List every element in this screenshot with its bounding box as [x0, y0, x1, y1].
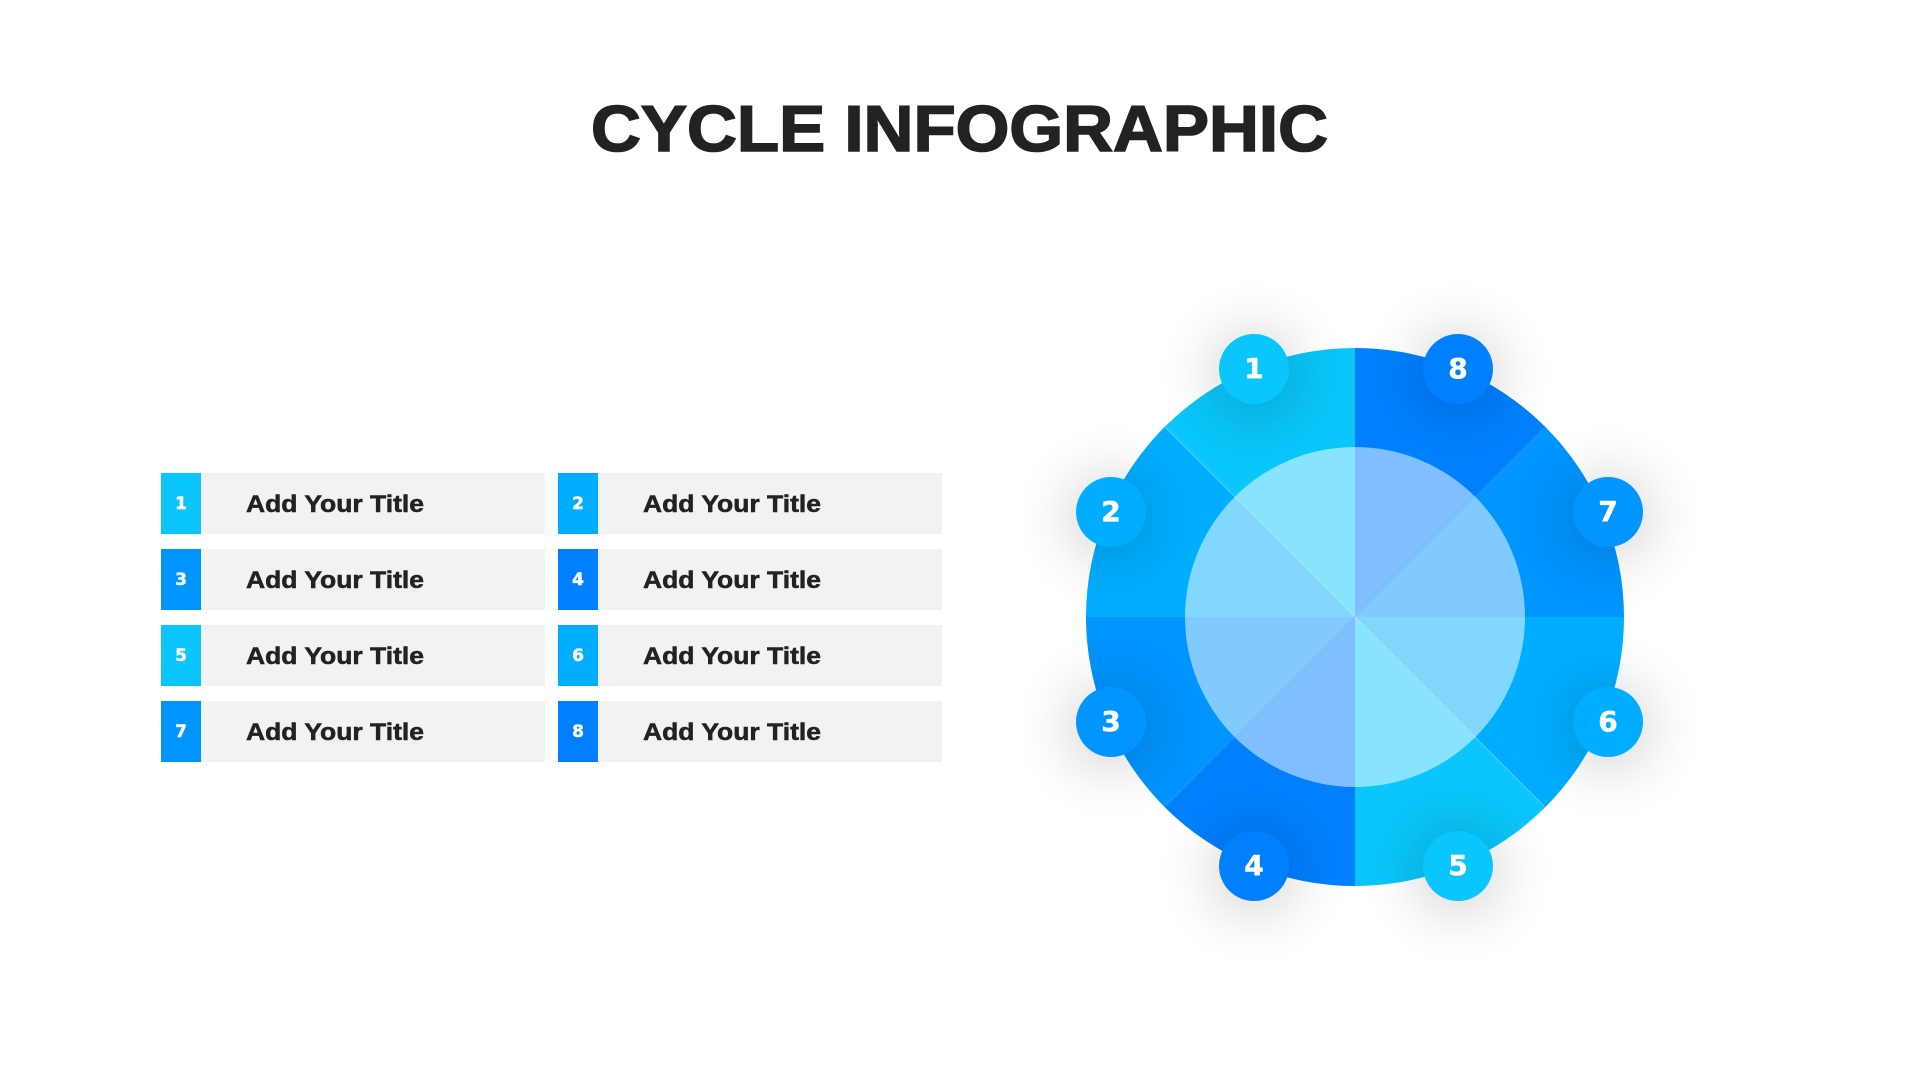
list row 6: 6 — [572, 646, 584, 666]
list row 1: 1 — [175, 494, 187, 514]
badge 8 — [1423, 334, 1493, 404]
list row 5: 5 — [175, 646, 187, 666]
list row 2: 2 — [572, 494, 584, 514]
list row 3: 3 — [175, 570, 187, 590]
list row 4: Add Your Title — [643, 567, 821, 594]
badge 7 shadow — [1562, 471, 1654, 563]
list row 1: Add Your Title — [246, 491, 424, 518]
badge 4 shadow — [1208, 825, 1300, 917]
badge 6 shadow — [1562, 681, 1654, 773]
badge 8 shadow — [1412, 328, 1504, 420]
cycle wheel: outer ring sectors — [1086, 348, 1624, 886]
list row 7: Add Your Title — [246, 719, 424, 746]
badge 3 shadow — [1065, 681, 1157, 773]
list row 4 — [558, 549, 942, 610]
list row 6 — [558, 625, 942, 686]
badge 3: 3 — [1101, 705, 1121, 738]
badge 6: 6 — [1598, 705, 1618, 738]
list of titles — [161, 473, 942, 762]
badge 7 — [1573, 477, 1643, 547]
title: CYCLE INFOGRAPHIC — [591, 92, 1328, 165]
badge 5: 5 — [1448, 849, 1468, 882]
list row 3: Add Your Title — [246, 567, 424, 594]
badge 4 — [1219, 831, 1289, 901]
badge 7: 7 — [1598, 495, 1618, 528]
list row 7 — [161, 701, 545, 762]
badge 1 — [1219, 334, 1289, 404]
badge 6 — [1573, 687, 1643, 757]
badge 1: 1 — [1244, 352, 1264, 385]
badge 2: 2 — [1101, 495, 1121, 528]
list row 8: 8 — [572, 722, 584, 742]
badge 8: 8 — [1448, 352, 1468, 385]
badge 2 — [1076, 477, 1146, 547]
list row 4: 4 — [572, 570, 584, 590]
list row 5: Add Your Title — [246, 643, 424, 670]
list row 5 — [161, 625, 545, 686]
list row 2: Add Your Title — [643, 491, 821, 518]
list row 7: 7 — [175, 722, 187, 742]
list row 3 — [161, 549, 545, 610]
badge 4: 4 — [1244, 849, 1264, 882]
list row 8: Add Your Title — [643, 719, 821, 746]
list row 1 — [161, 473, 545, 534]
badge 3 — [1076, 687, 1146, 757]
cycle wheel: inner disc sectors — [1165, 427, 1545, 807]
badge 5 shadow — [1412, 825, 1504, 917]
list row 6: Add Your Title — [643, 643, 821, 670]
list row 8 — [558, 701, 942, 762]
badge 2 shadow — [1065, 471, 1157, 563]
badge 5 — [1423, 831, 1493, 901]
badge 1 shadow — [1208, 328, 1300, 420]
list row 2 — [558, 473, 942, 534]
